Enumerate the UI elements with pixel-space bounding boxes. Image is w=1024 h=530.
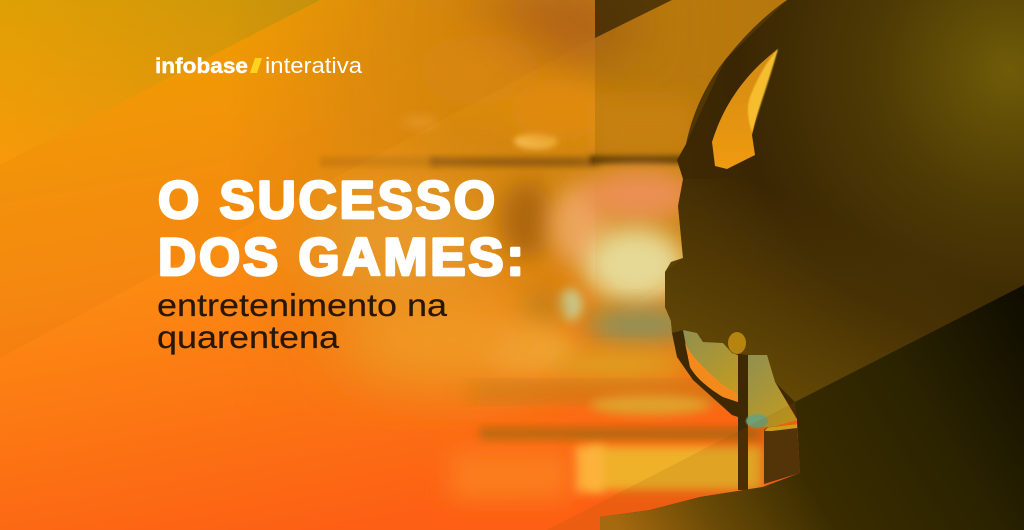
lit lower head above the diagonal [665, 179, 1024, 402]
blurred game room background [270, 0, 787, 507]
monitor box [764, 424, 800, 484]
lower right shadow plane with shoulder [600, 285, 1024, 530]
subtitle [157, 287, 448, 355]
teal reflection [746, 414, 768, 428]
logo [155, 53, 363, 78]
subtitle: quarentena [157, 319, 340, 355]
microphone boom highlight [685, 343, 738, 402]
hair rim light [748, 49, 778, 132]
gap between mic boom and ear cup [683, 330, 738, 402]
headset silhouette [600, 0, 1024, 530]
title [158, 171, 524, 287]
logo: interativa [265, 53, 363, 78]
lower sky plane [547, 402, 800, 530]
subtitle: entretenimento na [157, 287, 448, 323]
title: O SUCESSO [158, 171, 495, 230]
logo slash [250, 58, 262, 73]
diagonal light overlays [0, 0, 787, 358]
earcup lobe [728, 332, 746, 354]
gap right of mic stem [748, 355, 797, 428]
gap between headband and head [712, 49, 778, 169]
title: DOS GAMES: [158, 228, 524, 287]
logo: infobase [155, 55, 248, 78]
